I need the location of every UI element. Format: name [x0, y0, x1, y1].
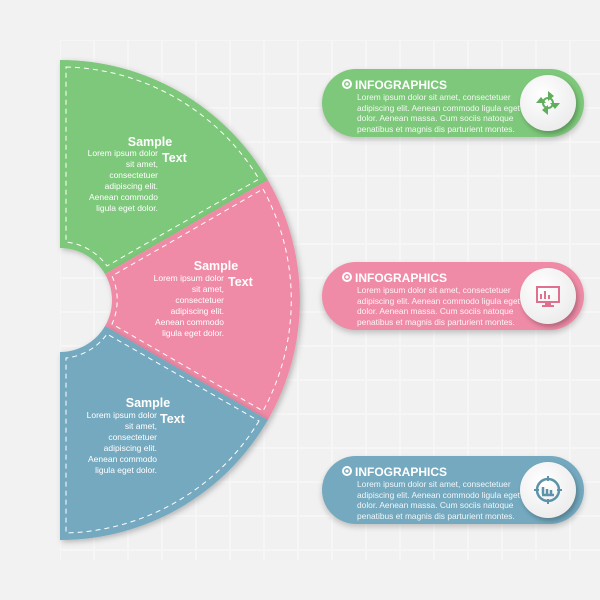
text: blue segment: consectetuer [108, 432, 157, 442]
panel: pink pill [322, 262, 584, 330]
text: pink segment [154, 259, 254, 338]
text: green segment [88, 135, 188, 213]
text: green segment: sit amet, [126, 159, 158, 169]
text: green segment: Text [162, 151, 188, 165]
text: green segment: adipiscing elit. [105, 181, 158, 191]
text: blue segment: Lorem ipsum dolor [87, 410, 157, 420]
text: green segment: Sample [128, 135, 172, 149]
icon: cycle arrows [520, 75, 576, 131]
text: pink segment: consectetuer [175, 295, 224, 305]
text: green segment: Aenean commodo [89, 192, 158, 202]
text: blue segment [87, 396, 186, 475]
panel: pink pill: Lorem ipsum dolor sit amet, consectetuer adipiscing elit. Aenean commodo ligula eget dolor. Aenean massa. Cum sociis natoque penatibus et magnis dis parturient montes. [357, 285, 520, 326]
segment: blue [60, 326, 268, 540]
panel: pink pill: INFOGRAPHICS [355, 271, 447, 285]
text: blue segment: Text [160, 412, 186, 426]
panel: blue pill: Lorem ipsum dolor sit amet, consectetuer adipiscing elit. Aenean commodo ligula eget dolor. Aenean massa. Cum sociis natoque penatibus et magnis dis parturient montes. [357, 479, 520, 520]
text: pink segment: Lorem ipsum dolor [154, 273, 224, 283]
text: pink segment: sit amet, [192, 284, 224, 294]
panel: blue pill [322, 456, 584, 524]
text: pink segment: Text [228, 275, 254, 289]
text: pink segment: ligula eget dolor. [162, 328, 224, 338]
text: blue segment: sit amet, [125, 421, 157, 431]
panel: blue pill: INFOGRAPHICS [355, 465, 447, 479]
icon: monitor [520, 268, 576, 324]
text: pink segment: Sample [194, 259, 238, 273]
panel: green pill: Lorem ipsum dolor sit amet, consectetuer adipiscing elit. Aenean commodo ligula eget dolor. Aenean massa. Cum sociis natoque penatibus et magnis dis parturient montes. [357, 92, 520, 134]
panel: green pill [322, 69, 584, 137]
text: pink segment: Aenean commodo [155, 317, 224, 327]
segment: pink [105, 180, 300, 420]
text: green segment: consectetuer [109, 170, 158, 180]
text: green segment: ligula eget dolor. [96, 203, 158, 213]
text: green segment: Lorem ipsum dolor [88, 148, 158, 158]
text: pink segment: adipiscing elit. [171, 306, 224, 316]
icon: chart target [520, 462, 576, 518]
text: blue segment: Sample [126, 396, 170, 410]
segment: green [60, 60, 268, 274]
text: blue segment: ligula eget dolor. [95, 465, 157, 475]
text: blue segment: adipiscing elit. [104, 443, 157, 453]
panel: green pill: INFOGRAPHICS [355, 78, 447, 92]
text: blue segment: Aenean commodo [88, 454, 157, 464]
